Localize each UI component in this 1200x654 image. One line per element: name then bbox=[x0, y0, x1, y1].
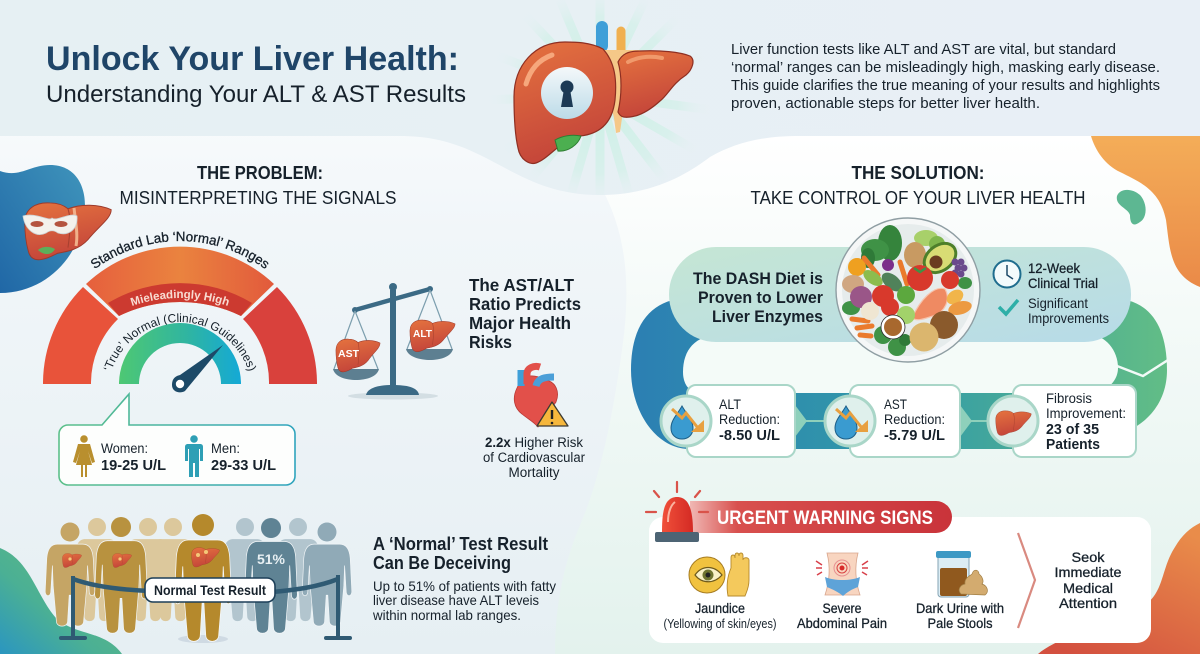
brown grains bbox=[930, 311, 958, 339]
icon: siren bbox=[646, 482, 708, 542]
text block: intro: Liver function tests like ALT and AST are vital, but standard bbox=[731, 42, 1116, 58]
illustration: food plate bbox=[836, 218, 980, 362]
text: ALT value: -8.50 U/L bbox=[719, 427, 780, 444]
figure slate right bbox=[302, 522, 352, 626]
text: seek attention bbox=[1054, 549, 1122, 611]
leafy greens bbox=[842, 225, 972, 356]
chart: gauge bbox=[43, 232, 317, 392]
text: DASH diet: Proven to Lower bbox=[698, 288, 823, 307]
text: seek attention: Medical bbox=[1063, 580, 1113, 596]
blob: blue top left bbox=[0, 165, 85, 293]
icon: scales bbox=[333, 283, 455, 400]
carrots bbox=[852, 258, 907, 336]
salmon bbox=[912, 288, 947, 320]
small fatty livers bbox=[62, 548, 219, 568]
decorative rays behind liver bbox=[518, 8, 686, 182]
text: fibrosis value: Fibrosis bbox=[1046, 390, 1092, 406]
icon: masked liver bbox=[23, 203, 111, 260]
gauge right red segment bbox=[243, 287, 317, 384]
panel: DASH diet pill bbox=[669, 247, 1131, 342]
figure with liver 2 bbox=[95, 517, 147, 633]
green arc bbox=[119, 323, 241, 384]
heading: AST ALT ratio bbox=[469, 275, 581, 352]
title: Unlock Your Liver Health: bbox=[46, 40, 459, 78]
text: fibrosis value: Improvement: bbox=[1046, 405, 1126, 421]
panel: warning signs bbox=[649, 517, 1151, 643]
heading: AST ALT ratio: Risks bbox=[469, 332, 512, 352]
blob: green bottom left bbox=[0, 548, 122, 654]
tomatoes bbox=[872, 265, 959, 316]
text: seek attention: Immediate bbox=[1054, 564, 1122, 580]
panel: solution background bbox=[555, 136, 1200, 654]
text block: intro: proven, actionable steps for better liver health. bbox=[731, 96, 1040, 112]
heading and text: deceiving result: Up to 51% of patients with fatty bbox=[373, 578, 556, 594]
apricot slices bbox=[944, 287, 966, 307]
text: clinical trial: 12-Week bbox=[1028, 260, 1081, 276]
barrier with label bbox=[61, 575, 350, 638]
callout: normal ranges bbox=[59, 394, 295, 485]
icon: check bbox=[999, 300, 1018, 314]
heading and text: deceiving result: liver disease have ALT leveis bbox=[373, 592, 539, 608]
text: improvements: Significant bbox=[1028, 295, 1088, 311]
text block: intro: This guide clarifies the true meaning of your results and highlights bbox=[731, 78, 1160, 94]
pathway ring bbox=[631, 298, 1168, 449]
text: cardiovascular risk: 2.2x Higher Risk bbox=[485, 435, 583, 450]
text: jaundice bbox=[664, 600, 776, 631]
red onion bbox=[850, 286, 872, 308]
cucumber and greens bbox=[861, 267, 885, 289]
text: jaundice: Jaundice bbox=[695, 600, 745, 616]
text: women range: Women: bbox=[101, 441, 148, 456]
text: men range: 29-33 U/L bbox=[211, 457, 276, 474]
text: jaundice: (Yellowing of skin/eyes) bbox=[664, 617, 776, 631]
heading: the solution: TAKE CONTROL OF YOUR LIVER HEALTH bbox=[750, 188, 1086, 208]
text: cardiovascular risk bbox=[483, 435, 586, 480]
garlic bbox=[861, 302, 879, 320]
barrier with label: Normal Test Result bbox=[154, 583, 266, 598]
text: dark urine: Dark Urine with bbox=[916, 600, 1004, 616]
text: DASH diet bbox=[693, 269, 823, 326]
label: misleadingly high: Mieleadingly High bbox=[130, 290, 229, 306]
potato bbox=[904, 242, 926, 268]
text: abdominal pain: Abdominal Pain bbox=[797, 615, 887, 631]
heading: AST ALT ratio: Ratio Predicts bbox=[469, 294, 581, 314]
text: cardiovascular risk: Mortality bbox=[508, 465, 560, 480]
blob: red bottom right bbox=[1038, 523, 1200, 654]
heading: AST ALT ratio: The AST/ALT bbox=[469, 275, 574, 295]
icon: liver with keyhole bbox=[514, 27, 693, 163]
header band bbox=[0, 0, 1200, 195]
grain bbox=[842, 275, 864, 293]
text: cardiovascular risk: of Cardiovascular bbox=[483, 450, 586, 465]
text: ALT value: ALT bbox=[719, 396, 741, 412]
small bowl bbox=[881, 315, 905, 339]
grapes bbox=[952, 258, 968, 278]
text: improvements bbox=[1028, 295, 1109, 326]
text: improvements: Improvements bbox=[1028, 310, 1109, 326]
orange bbox=[848, 258, 866, 276]
blob: orange top right bbox=[1091, 136, 1200, 287]
main gold figure bbox=[174, 514, 232, 643]
text: fibrosis value: 23 of 35 bbox=[1046, 421, 1099, 438]
pea bbox=[897, 286, 915, 304]
title: Understanding Your ALT & AST Results bbox=[46, 81, 466, 108]
text: AST value: AST bbox=[884, 396, 907, 412]
label: standard range: Standard Lab ‘Normal’ Ranges bbox=[91, 232, 268, 268]
icon: man bbox=[185, 435, 203, 477]
text: men range: Men: bbox=[211, 441, 240, 456]
text: abdominal pain: Severe bbox=[822, 600, 862, 616]
avocado bbox=[916, 235, 964, 281]
text: ALT value: Reduction: bbox=[719, 411, 780, 427]
needle bbox=[172, 345, 223, 392]
gauge left red segment bbox=[43, 287, 118, 384]
text: AST value: Reduction: bbox=[884, 411, 945, 427]
card: fibrosis improvement bbox=[988, 385, 1136, 457]
icon: liver bbox=[988, 396, 1038, 446]
text: AST value: -5.79 U/L bbox=[884, 427, 945, 444]
heading: the problem: THE PROBLEM: bbox=[197, 163, 323, 183]
figure slate dark with 51% bbox=[245, 518, 297, 633]
text: dark urine bbox=[916, 600, 1004, 631]
text: men range bbox=[211, 441, 276, 474]
connectors between cards bbox=[795, 405, 994, 437]
heading and text: deceiving result bbox=[372, 534, 556, 623]
icon: heart warning bbox=[514, 366, 568, 427]
heading: the solution: THE SOLUTION: bbox=[852, 163, 984, 183]
blob: teal small bbox=[1117, 190, 1146, 224]
text block: intro bbox=[731, 42, 1160, 112]
text: AST value bbox=[884, 396, 945, 444]
card: AST reduction bbox=[825, 385, 960, 457]
misleadingly high band bbox=[108, 283, 252, 316]
banner: urgent warning signs bbox=[690, 501, 952, 533]
text: fibrosis value bbox=[1046, 390, 1126, 453]
figure slate dark with 51%: 51% bbox=[257, 551, 286, 567]
title bbox=[46, 40, 466, 108]
liver: AST: AST bbox=[338, 348, 360, 360]
icon: falling drop bbox=[825, 396, 875, 446]
text: dark urine: Pale Stools bbox=[928, 615, 992, 631]
icon: jaundice eye and hand bbox=[689, 553, 749, 596]
text: ALT value bbox=[719, 396, 780, 444]
icon: falling drop bbox=[661, 396, 711, 446]
heading: the solution bbox=[750, 163, 1086, 208]
text: fibrosis value: Patients bbox=[1046, 436, 1100, 453]
heading and text: deceiving result: Can Be Deceiving bbox=[373, 553, 511, 573]
heading: AST ALT ratio: Major Health bbox=[469, 313, 571, 333]
text: abdominal pain bbox=[797, 600, 887, 631]
text: women range bbox=[101, 441, 166, 474]
label: true normal: ‘True’ Normal (Clinical Guidelines) bbox=[104, 313, 256, 371]
icon: urine jar and stool bbox=[936, 551, 987, 597]
heading and text: deceiving result: A ‘Normal’ Test Result bbox=[373, 534, 548, 554]
text: clinical trial: Clinical Trial bbox=[1028, 275, 1098, 291]
liver: ALT: ALT bbox=[413, 328, 433, 340]
text: seek attention: Attention bbox=[1059, 595, 1117, 611]
text: DASH diet: The DASH Diet is bbox=[693, 269, 823, 288]
text block: intro: ‘normal’ ranges can be misleadingly high, masking early disease. bbox=[731, 60, 1160, 76]
banner: urgent warning signs: URGENT WARNING SIGNS bbox=[717, 507, 933, 529]
icon: woman bbox=[73, 435, 95, 477]
figure with liver 1 bbox=[45, 522, 95, 626]
gauge top segment bbox=[86, 247, 274, 316]
heading: the problem bbox=[120, 163, 396, 208]
heading: the problem: MISINTERPRETING THE SIGNALS bbox=[120, 188, 396, 208]
text: seek attention: Seok bbox=[1072, 549, 1106, 565]
heading and text: deceiving result: within normal lab ranges. bbox=[372, 607, 521, 623]
illustration: crowd of patients bbox=[45, 514, 352, 643]
text: clinical trial bbox=[1028, 260, 1098, 291]
back row slate figures bbox=[222, 518, 321, 621]
icon: clock bbox=[994, 260, 1020, 288]
text: women range: 19-25 U/L bbox=[101, 457, 166, 474]
arrow: chevron divider bbox=[1018, 533, 1035, 628]
text: DASH diet: Liver Enzymes bbox=[712, 307, 823, 326]
card: ALT reduction bbox=[661, 385, 795, 457]
lime bbox=[897, 306, 915, 324]
icon: abdominal pain bbox=[816, 553, 868, 596]
back row figures bbox=[74, 518, 196, 621]
